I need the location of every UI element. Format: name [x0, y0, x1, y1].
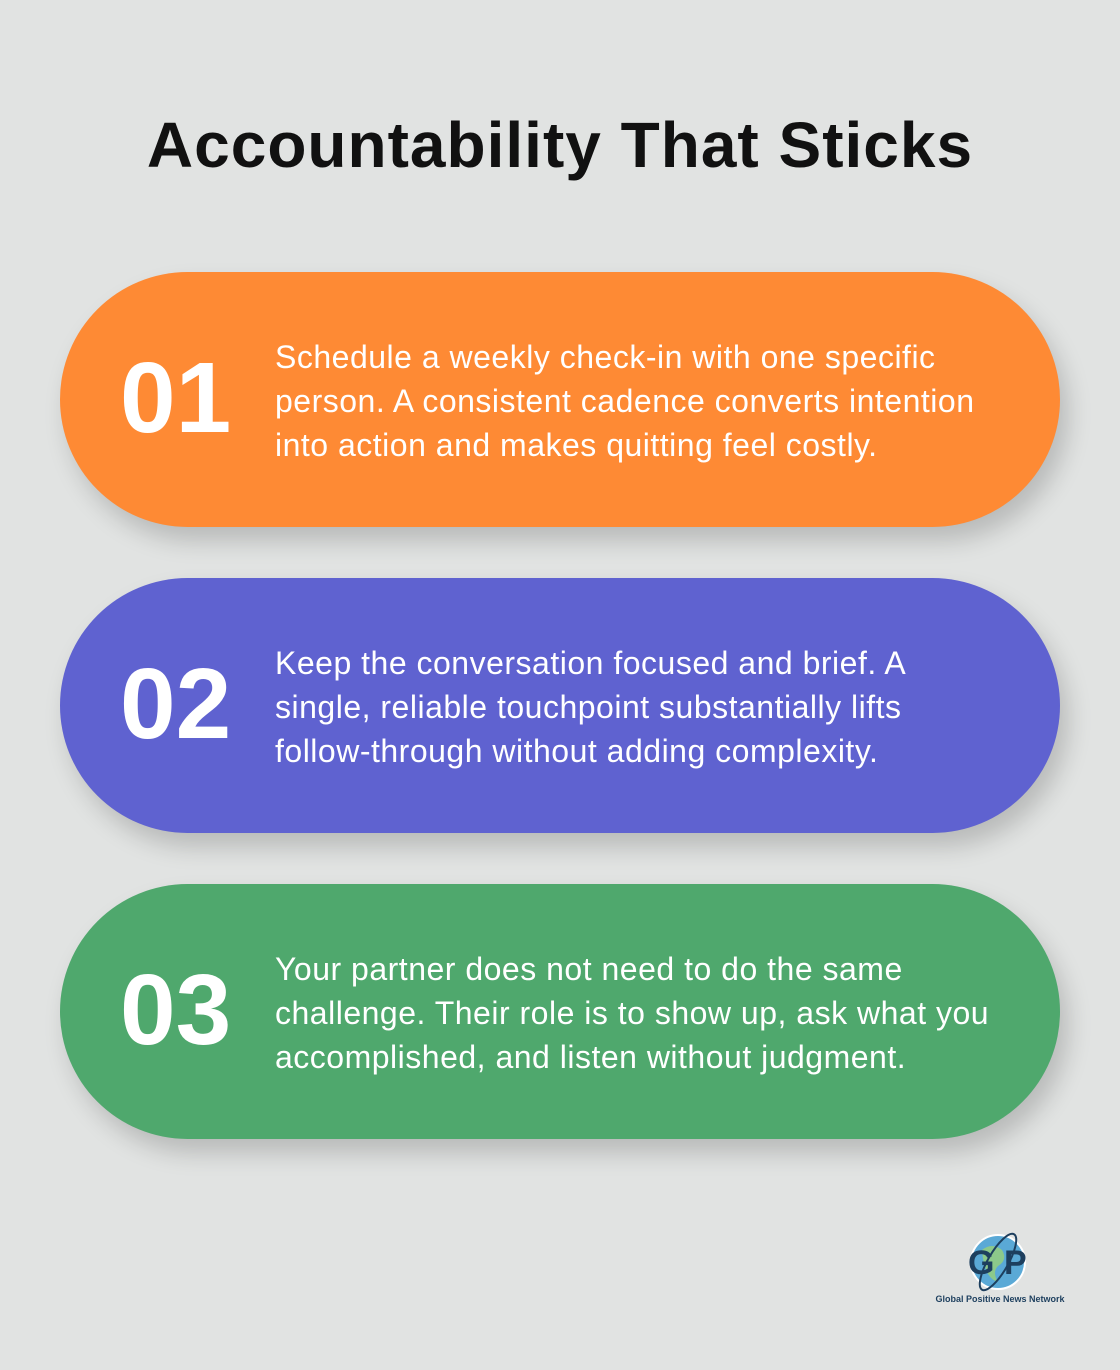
number 02: 02	[120, 648, 231, 760]
logo: P	[1004, 1244, 1027, 1282]
logo: Global Positive News Network	[935, 1294, 1065, 1304]
text 01	[275, 339, 974, 463]
text 03: challenge. Their role is to show up, ask what you	[275, 995, 989, 1031]
text 01: person. A consistent cadence converts intention	[275, 383, 974, 419]
text 02: single, reliable touchpoint substantially lifts	[275, 689, 902, 725]
text 01: Schedule a weekly check-in with one specific	[275, 339, 936, 375]
number 01: 01	[120, 342, 231, 454]
text 03	[275, 951, 989, 1075]
panel: step 01	[60, 272, 1060, 527]
text 02	[275, 645, 906, 769]
text 01: into action and makes quitting feel costly.	[275, 427, 878, 463]
text 03: accomplished, and listen without judgment.	[275, 1039, 906, 1075]
text 02: Keep the conversation focused and brief. A	[275, 645, 906, 681]
logo	[935, 1232, 1065, 1304]
panel: step 03	[60, 884, 1060, 1139]
title: Accountability That Sticks	[147, 109, 973, 181]
logo: G	[968, 1244, 994, 1282]
panel: step 02	[60, 578, 1060, 833]
number 03: 03	[120, 954, 231, 1066]
text 02: follow-through without adding complexity.	[275, 733, 878, 769]
text 03: Your partner does not need to do the same	[275, 951, 903, 987]
